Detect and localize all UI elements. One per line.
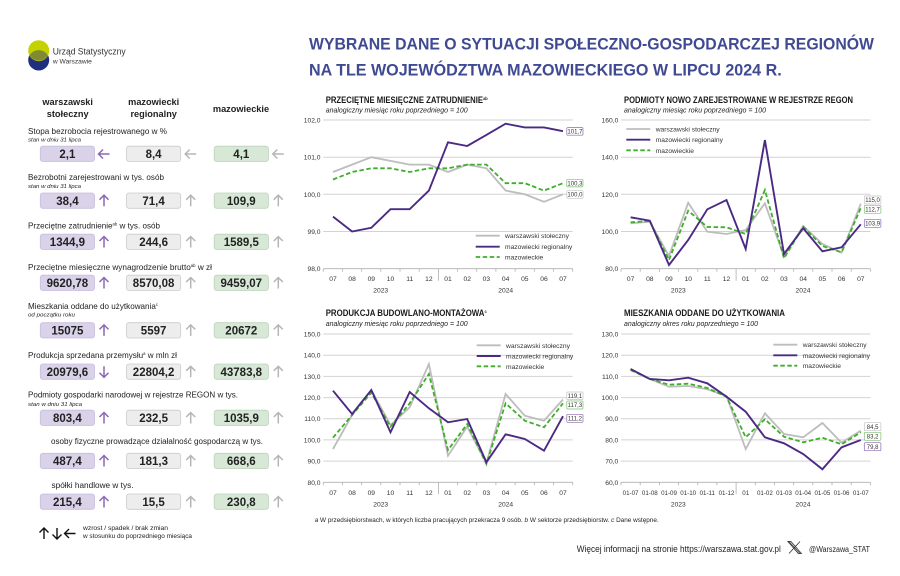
chart: mieszkania oddane do użytkowania: 100,0 <box>602 395 619 402</box>
chart: podmioty nowo zarejestrowane <box>602 95 881 294</box>
chart: mieszkania oddane do użytkowania: 60,0 <box>605 480 619 487</box>
chart: produkcja budowlano-montażowa: PRODUKCJA BUDOWLANO-MONTAŻOWA <box>326 308 504 318</box>
row: bezrobotni <box>28 172 283 208</box>
row: mieszkania: 15075 <box>51 326 84 338</box>
chart: mieszkania oddane do użytkowania: 01-07 <box>623 490 639 497</box>
chart: podmioty nowo zarejestrowane: 06 <box>838 276 846 283</box>
chart: przeciętne miesięczne zatrudnienie: mazowiecki regionalny <box>505 244 573 251</box>
chart: produkcja budowlano-montażowa: 04 <box>502 490 510 497</box>
row: produkcja sprzedana: 22804,2 <box>133 367 174 379</box>
chart: mieszkania oddane do użytkowania: warszawski stołeczny <box>802 342 867 349</box>
table column headers: mazowieckie <box>213 104 269 114</box>
row: zatrudnienie: 1344,9 <box>50 237 85 249</box>
row: stopa bezrobocia: 4,1 <box>233 149 250 161</box>
row: stopa bezrobocia: stan w dniu 31 lipca <box>28 138 81 144</box>
chart: mieszkania oddane do użytkowania: 01-07 <box>853 490 869 497</box>
row: zatrudnienie: 1589,5 <box>224 237 259 249</box>
chart: produkcja budowlano-montażowa: 01 <box>444 490 452 497</box>
row: spółki handlowe: 15,5 <box>142 497 165 509</box>
chart: produkcja budowlano-montażowa: 07 <box>559 490 567 497</box>
row: mieszkania: 5597 <box>141 326 166 338</box>
chart: podmioty nowo zarejestrowane: 09 <box>665 276 673 283</box>
chart: podmioty nowo zarejestrowane: 10 <box>684 276 692 283</box>
row: wynagrodzenie: w zł <box>196 262 212 272</box>
chart: mieszkania oddane do użytkowania: MIESZKANIA ODDANE DO UŻYTKOWANIA <box>624 308 786 318</box>
chart: podmioty nowo zarejestrowane: 112,7 <box>865 208 881 214</box>
chart: przeciętne miesięczne zatrudnienie: 01 <box>444 276 452 283</box>
chart: przeciętne miesięczne zatrudnienie: 04 <box>502 276 510 283</box>
chart: produkcja budowlano-montażowa: 110,0 <box>304 416 321 423</box>
chart: produkcja budowlano-montażowa: 08 <box>348 490 356 497</box>
row: podmioty gospodarki: Podmioty gospodarki narodowej w rejestrze REGON w tys. <box>28 390 238 400</box>
row: zatrudnienie: w tys. osób <box>117 220 160 230</box>
row: spółki handlowe: 230,8 <box>227 497 256 509</box>
chart: podmioty nowo zarejestrowane: 2024 <box>796 288 811 294</box>
row: zatrudnienie: Przeciętne zatrudnienie <box>28 220 118 230</box>
row: mieszkania: c <box>156 302 159 307</box>
chart: produkcja budowlano-montażowa: 05 <box>521 490 529 497</box>
row: zatrudnienie <box>28 220 283 250</box>
row: mieszkania <box>28 301 283 338</box>
chart: przeciętne miesięczne zatrudnienie: 12 <box>425 276 433 283</box>
chart: podmioty nowo zarejestrowane: mazowieckie <box>656 148 694 155</box>
chart: produkcja budowlano-montażowa: 119,1 <box>568 394 583 400</box>
chart: przeciętne miesięczne zatrudnienie: mazowieckie <box>505 254 544 262</box>
chart: mieszkania oddane do użytkowania: 01-06 <box>834 490 850 497</box>
chart: podmioty nowo zarejestrowane: 103,9 <box>865 222 881 228</box>
chart: produkcja budowlano-montażowa: 02 <box>463 490 471 497</box>
chart: produkcja budowlano-montażowa: 120,0 <box>304 395 321 402</box>
row: produkcja sprzedana: 43783,8 <box>221 367 263 379</box>
chart: produkcja budowlano-montażowa: 150,0 <box>304 332 321 338</box>
chart: podmioty nowo zarejestrowane: 2023 <box>671 288 686 294</box>
chart: mieszkania oddane do użytkowania: analogiczny okres roku poprzedniego = 100 <box>624 319 759 328</box>
chart: podmioty nowo zarejestrowane: 115,0 <box>865 198 881 204</box>
chart: mieszkania oddane do użytkowania: 01-04 <box>795 490 812 497</box>
title: WYBRANE DANE O SYTUACJI SPOŁECZNO-GOSPODARCZEJ REGIONÓW <box>309 34 874 53</box>
chart: produkcja budowlano-montażowa: 111,2 <box>568 416 583 422</box>
row: mieszkania: 20672 <box>225 326 257 338</box>
row: spółki handlowe: spółki handlowe w tys. <box>52 480 134 490</box>
row: stopa bezrobocia <box>28 126 284 162</box>
chart: przeciętne miesięczne zatrudnienie <box>304 95 583 294</box>
chart: mieszkania oddane do użytkowania: 01-08 <box>642 490 658 497</box>
chart: przeciętne miesięczne zatrudnienie: 102,0 <box>304 118 321 124</box>
chart: podmioty nowo zarejestrowane: 02 <box>761 276 769 283</box>
row: osoby fizyczne: 181,3 <box>139 456 168 468</box>
logo <box>28 40 126 70</box>
row: produkcja sprzedana: 20979,6 <box>47 367 88 379</box>
row: podmioty gospodarki: stan w dniu 31 lipca <box>28 402 82 408</box>
chart: podmioty nowo zarejestrowane: 160,0 <box>602 118 619 124</box>
chart: mieszkania oddane do użytkowania: 01-09 <box>661 490 677 497</box>
chart: przeciętne miesięczne zatrudnienie: 11 <box>406 276 413 283</box>
chart: mieszkania oddane do użytkowania: 70,0 <box>605 459 619 466</box>
chart: podmioty nowo zarejestrowane: 11 <box>704 276 711 283</box>
chart: mieszkania oddane do użytkowania: 2023 <box>671 502 686 508</box>
chart: mieszkania oddane do użytkowania: 130,0 <box>602 332 619 338</box>
chart: przeciętne miesięczne zatrudnienie: 100,0 <box>567 193 583 199</box>
chart: mieszkania oddane do użytkowania: 80,0 <box>605 437 619 444</box>
row: mieszkania: Mieszkania oddane do użytkowania <box>28 301 164 311</box>
row: osoby fizyczne <box>40 436 283 469</box>
title: NA TLE WOJEWÓDZTWA MAZOWIECKIEGO W LIPCU 2024 R. <box>309 61 782 80</box>
more information link: Więcej informacji na stronie https://warszawa.stat.gov.pl <box>577 543 781 554</box>
chart: produkcja budowlano-montażowa: c <box>484 309 487 314</box>
chart: mieszkania oddane do użytkowania: 79,8 <box>867 445 879 451</box>
chart: mieszkania oddane do użytkowania: 01-10 <box>680 490 697 497</box>
chart: produkcja budowlano-montażowa: 2024 <box>498 502 513 508</box>
row: osoby fizyczne: osoby fizyczne prowadzące działalność gospodarczą w tys. <box>51 436 263 446</box>
chart: podmioty nowo zarejestrowane: 12 <box>723 276 730 283</box>
chart: produkcja budowlano-montażowa: 130,0 <box>304 374 321 381</box>
chart: przeciętne miesięczne zatrudnienie: 07 <box>559 276 567 283</box>
row: wynagrodzenie: Przeciętne miesięczne wynagrodzenie brutto <box>28 262 199 272</box>
chart: produkcja budowlano-montażowa: mazowieckie <box>506 364 545 371</box>
row: produkcja sprzedana: w mln zł <box>146 350 177 360</box>
table column headers <box>41 97 269 119</box>
row: zatrudnienie: ab <box>113 222 118 226</box>
logo: Urząd Statystyczny <box>53 46 126 56</box>
chart: przeciętne miesięczne zatrudnienie: 05 <box>521 276 529 283</box>
row: wynagrodzenie <box>28 262 283 290</box>
chart: produkcja budowlano-montażowa <box>304 308 583 508</box>
chart: podmioty nowo zarejestrowane: analogiczny miesiąc roku poprzedniego = 100 <box>624 106 767 114</box>
chart: podmioty nowo zarejestrowane: 100,0 <box>602 229 619 236</box>
row: stopa bezrobocia: 2,1 <box>59 149 76 161</box>
row: stopa bezrobocia: 8,4 <box>146 149 162 161</box>
chart: produkcja budowlano-montażowa: 10 <box>387 490 394 497</box>
chart: produkcja budowlano-montażowa: warszawski stołeczny <box>505 343 571 350</box>
chart: produkcja budowlano-montażowa: 06 <box>540 490 548 497</box>
chart: produkcja budowlano-montażowa: 80,0 <box>307 480 321 487</box>
chart: produkcja budowlano-montażowa: 140,0 <box>304 353 321 360</box>
chart: mieszkania oddane do użytkowania: 01-12 <box>719 490 735 497</box>
chart: przeciętne miesięczne zatrudnienie: 98,0 <box>307 266 321 273</box>
chart: przeciętne miesięczne zatrudnienie: 10 <box>387 276 394 283</box>
chart: mieszkania oddane do użytkowania: 01 <box>742 490 750 497</box>
chart: podmioty nowo zarejestrowane: 07 <box>857 276 865 283</box>
row: bezrobotni: 109,9 <box>227 196 256 208</box>
chart: mieszkania oddane do użytkowania: 90,0 <box>605 416 619 423</box>
chart: podmioty nowo zarejestrowane: 05 <box>819 276 826 283</box>
chart: podmioty nowo zarejestrowane: 07 <box>627 276 635 283</box>
row: wynagrodzenie: 9459,07 <box>221 278 262 290</box>
row: podmioty gospodarki: 1035,9 <box>224 413 259 425</box>
row: mieszkania: od początku roku <box>28 312 75 318</box>
chart: przeciętne miesięczne zatrudnienie: ab <box>483 96 488 101</box>
row: spółki handlowe <box>40 480 283 509</box>
chart: podmioty nowo zarejestrowane: 01 <box>742 276 750 283</box>
chart: produkcja budowlano-montażowa: 09 <box>368 490 375 497</box>
chart: przeciętne miesięczne zatrudnienie: 06 <box>540 276 548 283</box>
row: spółki handlowe: 215,4 <box>53 497 82 509</box>
chart: mieszkania oddane do użytkowania: mazowiecki regionalny <box>803 353 871 360</box>
row: bezrobotni: 71,4 <box>142 196 165 208</box>
chart: produkcja budowlano-montażowa: 100,0 <box>304 437 321 444</box>
chart: mieszkania oddane do użytkowania: 01-02 <box>757 490 773 497</box>
row: produkcja sprzedana <box>28 350 283 379</box>
chart: przeciętne miesięczne zatrudnienie: 100,0 <box>304 192 321 199</box>
row: bezrobotni: 38,4 <box>56 196 79 208</box>
chart: podmioty nowo zarejestrowane: 08 <box>646 276 654 283</box>
row: bezrobotni: Bezrobotni zarejestrowani w tys. osób <box>28 172 164 182</box>
chart: produkcja budowlano-montażowa: 03 <box>483 490 490 497</box>
chart: przeciętne miesięczne zatrudnienie: 03 <box>483 276 490 283</box>
chart: przeciętne miesięczne zatrudnienie: 99,0 <box>307 229 321 236</box>
arrow legend: wzrost / spadek / brak zmian <box>82 525 169 532</box>
chart: mieszkania oddane do użytkowania: 84,5 <box>867 425 879 431</box>
chart: produkcja budowlano-montażowa: 12 <box>425 490 433 497</box>
row: produkcja sprzedana: Produkcja sprzedana przemysłu <box>28 350 150 360</box>
table column headers: stołeczny <box>47 109 90 119</box>
chart: podmioty nowo zarejestrowane: 03 <box>780 276 788 283</box>
chart: mieszkania oddane do użytkowania: 01-03 <box>776 490 792 497</box>
chart: przeciętne miesięczne zatrudnienie: 2024 <box>498 288 513 294</box>
chart: produkcja budowlano-montażowa: 2023 <box>373 502 388 508</box>
arrow legend: w stosunku do poprzedniego miesiąca <box>82 533 193 540</box>
chart: przeciętne miesięczne zatrudnienie: PRZECIĘTNE MIESIĘCZNE ZATRUDNIENIE <box>326 95 505 105</box>
row: podmioty gospodarki: 232,5 <box>139 413 169 425</box>
arrow legend <box>40 525 193 540</box>
row: wynagrodzenie: 8570,08 <box>133 278 175 290</box>
row: stopa bezrobocia: Stopa bezrobocia rejestrowanego w % <box>28 126 167 136</box>
chart: podmioty nowo zarejestrowane: warszawski stołeczny <box>655 126 720 134</box>
chart: podmioty nowo zarejestrowane: 80,0 <box>605 266 619 273</box>
chart: mieszkania oddane do użytkowania: 01-05 <box>814 490 831 497</box>
row: produkcja sprzedana: a <box>143 351 146 356</box>
chart: podmioty nowo zarejestrowane: PODMIOTY NOWO ZAREJESTROWANE W REJESTRZE REGON <box>624 95 853 105</box>
chart: mieszkania oddane do użytkowania: 120,0 <box>602 353 619 360</box>
chart: przeciętne miesięczne zatrudnienie: 100,3 <box>567 181 583 187</box>
chart: produkcja budowlano-montażowa: 07 <box>329 490 337 497</box>
chart: produkcja budowlano-montażowa: 117,3 <box>568 403 583 409</box>
table column headers: regionalny <box>130 109 178 119</box>
chart: przeciętne miesięczne zatrudnienie: 101,0 <box>304 155 321 162</box>
chart: podmioty nowo zarejestrowane: mazowiecki regionalny <box>656 137 724 144</box>
chart: przeciętne miesięczne zatrudnienie: 02 <box>463 276 471 283</box>
logo: w Warszawie <box>52 58 92 65</box>
chart: przeciętne miesięczne zatrudnienie: 101,7 <box>567 130 583 136</box>
row: wynagrodzenie: 9620,78 <box>47 278 89 290</box>
row: podmioty gospodarki: 803,4 <box>53 413 82 425</box>
chart: przeciętne miesięczne zatrudnienie: 2023 <box>373 288 388 294</box>
chart: przeciętne miesięczne zatrudnienie: 08 <box>348 276 356 283</box>
row: zatrudnienie: 244,6 <box>139 237 168 249</box>
chart: mieszkania oddane do użytkowania: 83,2 <box>867 434 879 440</box>
row: osoby fizyczne: 487,4 <box>53 456 82 468</box>
chart: przeciętne miesięczne zatrudnienie: 09 <box>368 276 375 283</box>
chart: podmioty nowo zarejestrowane: 140,0 <box>602 155 619 162</box>
icon: X <box>788 542 802 554</box>
row: wynagrodzenie: ab <box>191 263 196 268</box>
social handle: @Warszawa_STAT <box>809 545 870 554</box>
chart: mieszkania oddane do użytkowania <box>602 308 881 508</box>
table column headers: mazowiecki <box>128 97 179 107</box>
row: bezrobotni: stan w dniu 31 lipca <box>28 184 81 190</box>
chart: mieszkania oddane do użytkowania: mazowieckie <box>803 363 841 370</box>
row: podmioty gospodarki <box>28 390 283 426</box>
title <box>309 34 874 80</box>
row: osoby fizyczne: 668,6 <box>227 456 256 468</box>
chart: przeciętne miesięczne zatrudnienie: 07 <box>329 276 337 283</box>
chart: przeciętne miesięczne zatrudnienie: analogiczny miesiąc roku poprzedniego = 100 <box>326 106 468 114</box>
chart: mieszkania oddane do użytkowania: 01-11 <box>700 490 716 497</box>
chart: produkcja budowlano-montażowa: 90,0 <box>307 459 321 466</box>
chart: produkcja budowlano-montażowa: mazowiecki regionalny <box>506 354 574 360</box>
chart: przeciętne miesięczne zatrudnienie: warszawski stołeczny <box>504 233 570 240</box>
chart: produkcja budowlano-montażowa: 11 <box>406 490 413 497</box>
chart: podmioty nowo zarejestrowane: 120,0 <box>602 192 619 199</box>
chart: mieszkania oddane do użytkowania: 2024 <box>796 502 811 508</box>
chart: podmioty nowo zarejestrowane: 04 <box>799 276 807 283</box>
table column headers: warszawski <box>41 97 93 107</box>
footnote: a W przedsiębiorstwach, w których liczba pracujących przekracza 9 osób. b W sektorze przedsiębiorstw. c Dane wstępne. <box>315 517 659 524</box>
chart: mieszkania oddane do użytkowania: 110,0 <box>602 374 619 381</box>
chart: produkcja budowlano-montażowa: analogiczny miesiąc roku poprzedniego = 100 <box>326 319 468 328</box>
